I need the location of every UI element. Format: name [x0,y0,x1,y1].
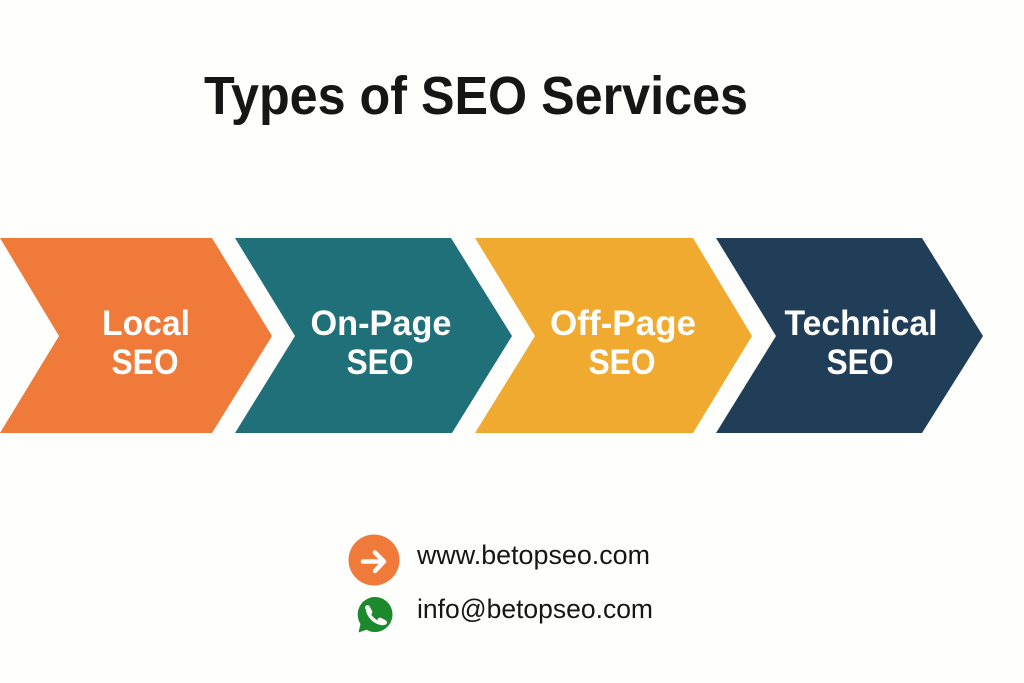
chevron: Technical SEO: SEO [826,343,894,382]
email text: info@betopseo.com [417,594,653,624]
chevron: On-Page SEO: On-Page [310,304,452,343]
icon: WhatsApp phone [358,597,392,632]
chevron: Technical SEO: Technical [784,304,938,343]
chevron: Local SEO: Local [102,304,190,343]
title: Types of SEO Services [204,66,748,126]
chevron: On-Page SEO [235,238,512,433]
chevron: Local SEO: SEO [112,343,178,382]
chevron: Off-Page SEO [475,238,752,433]
chevron: On-Page SEO: SEO [346,343,414,382]
chevron: Off-Page SEO: Off-Page [550,304,696,343]
chevron: Off-Page SEO: SEO [588,343,656,382]
chevron: Local SEO [0,238,272,433]
website text: www.betopseo.com [416,540,650,570]
icon: orange arrow circle [348,534,400,586]
chevron: Technical SEO [716,238,983,433]
